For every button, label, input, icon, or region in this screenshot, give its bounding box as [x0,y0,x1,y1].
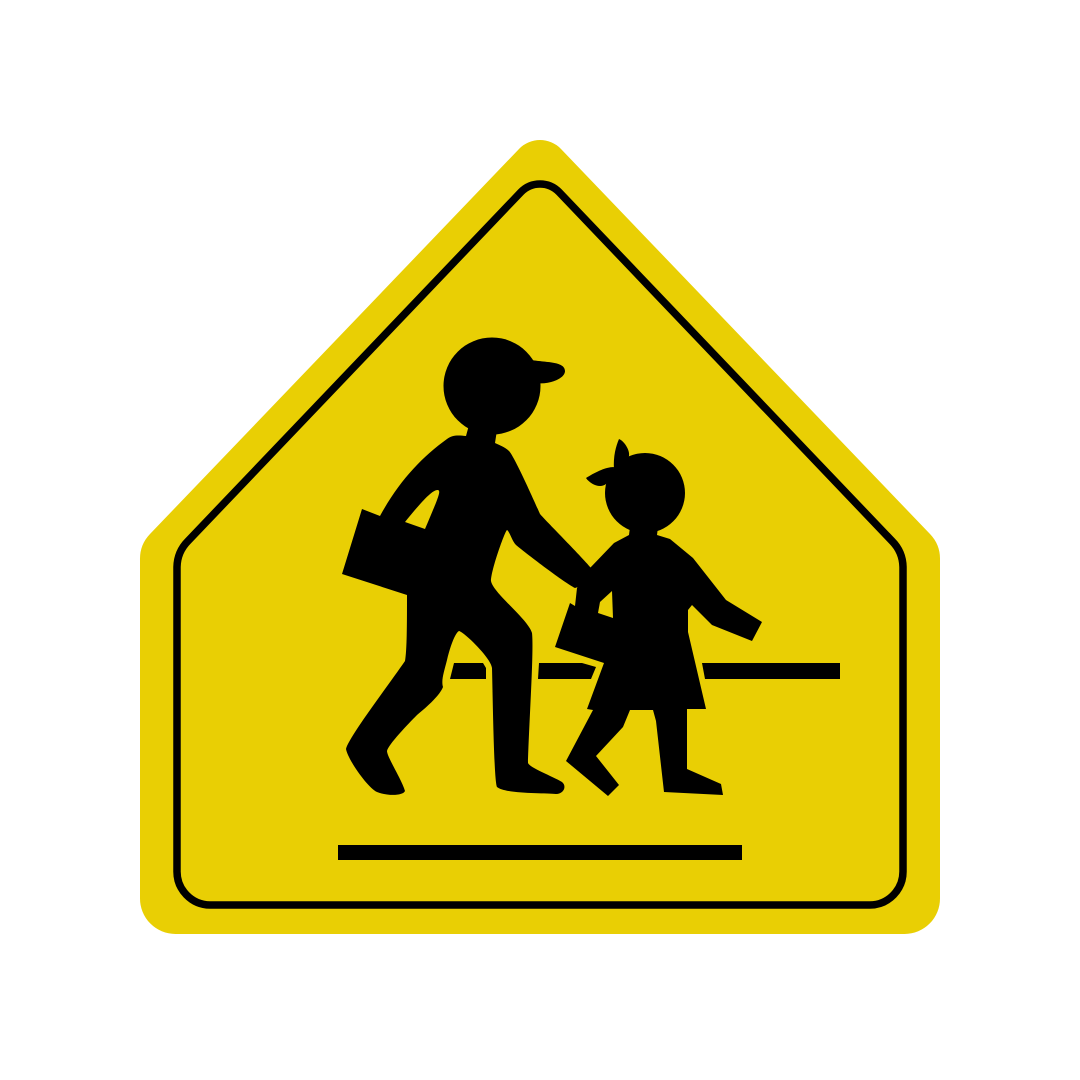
sign background pentagon [140,140,940,934]
crosswalk lower line [338,845,742,860]
child bag opening [598,591,613,618]
sign inner border [177,184,903,905]
crosswalk upper line segments [450,663,840,679]
adult bag opening [405,490,439,529]
icon: adult figure with bag [342,338,591,795]
icon: child figure with bag [555,439,762,796]
